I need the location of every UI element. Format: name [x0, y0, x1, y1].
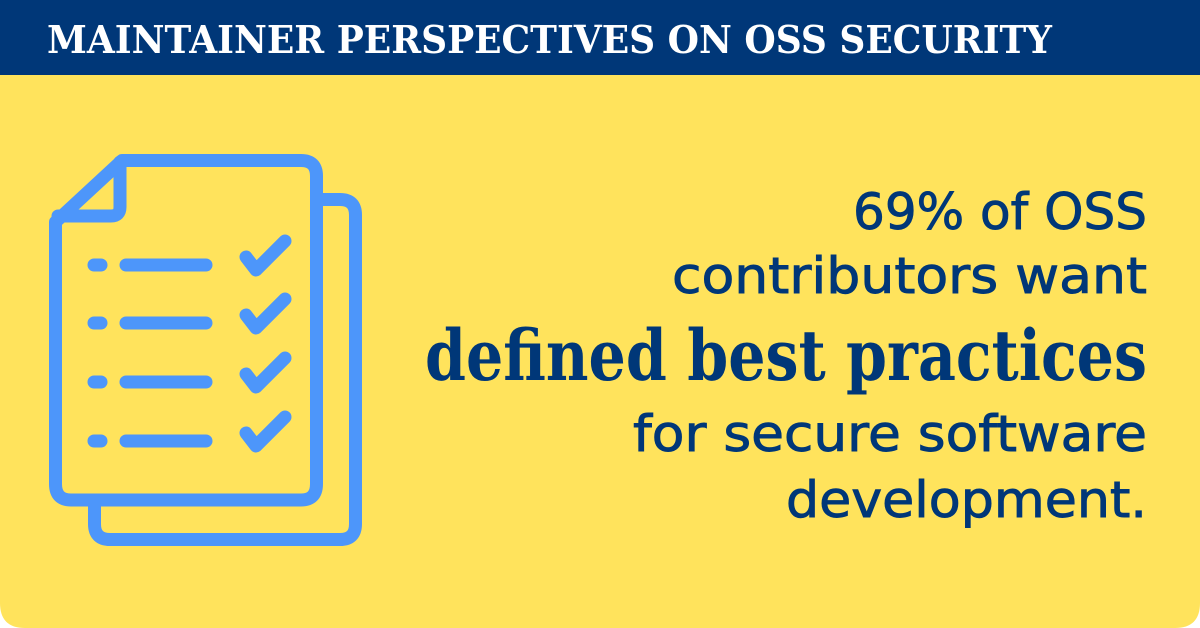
statistic text block: for secure software [633, 405, 1147, 463]
statistic text block: development. [786, 471, 1147, 529]
title: MAINTAINER PERSPECTIVES ON OSS SECURITY [47, 17, 1053, 62]
icon: checklist documents [56, 160, 356, 540]
header band [0, 0, 1200, 75]
fold [58, 162, 120, 216]
front document [56, 160, 316, 500]
back document [94, 200, 356, 540]
statistic text block: contributors want [672, 247, 1147, 305]
checklist rows [94, 241, 285, 446]
statistic text block: 69% of OSS [853, 183, 1147, 241]
statistic text block [425, 183, 1147, 529]
